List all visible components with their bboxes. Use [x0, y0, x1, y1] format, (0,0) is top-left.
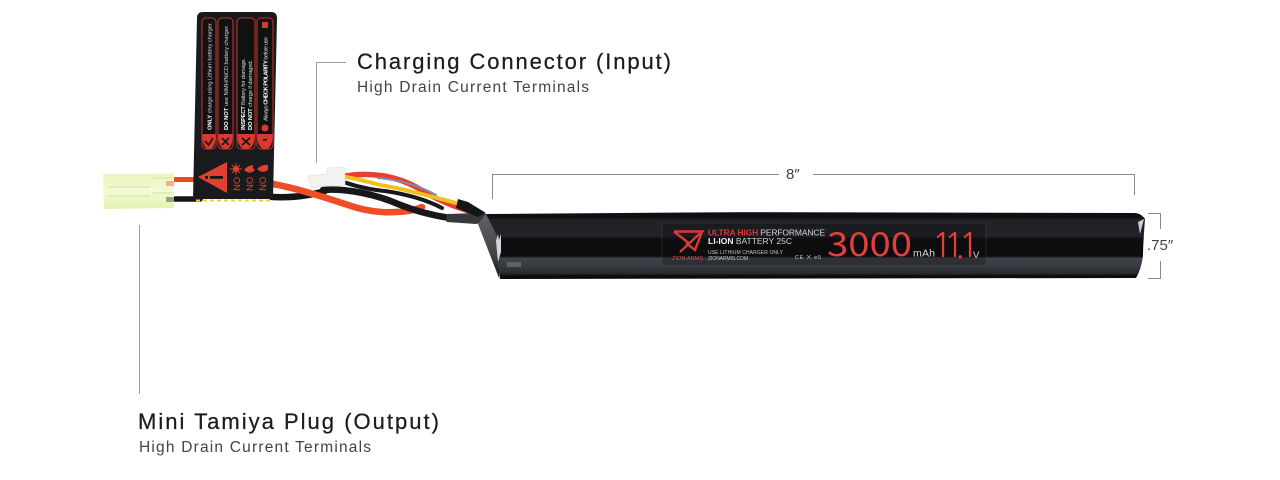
- no labels: NO: [245, 177, 256, 191]
- capacity: 3000: [827, 218, 912, 266]
- strip 4: [257, 18, 273, 149]
- cell: [486, 212, 1145, 279]
- dimension: length 8 inches: [492, 166, 1134, 199]
- heading: charging connector: [357, 49, 671, 96]
- capacity unit: mAh: [913, 248, 935, 260]
- strip 1: [202, 18, 216, 149]
- strip 3: DO NOT charge if damaged.: [248, 60, 254, 130]
- output wires: [175, 177, 200, 182]
- battery label: [662, 218, 986, 266]
- black wire rear: [272, 191, 325, 197]
- heading: mini tamiya plug: Mini Tamiya Plug (Output): [138, 409, 439, 434]
- dimension: diameter .75 inches: [1147, 214, 1174, 278]
- balance black wire: [333, 178, 442, 208]
- voltage: 11.1: [932, 229, 979, 262]
- strip 3: INSPECT Battery for damage.: [241, 58, 247, 130]
- end highlight: [1138, 219, 1144, 234]
- heading: mini tamiya plug: [138, 409, 439, 456]
- icon: drop: [257, 165, 268, 172]
- icon: sun: [230, 163, 242, 175]
- strip 2: DO NOT use NiMH/NiCD battery charger.: [224, 25, 230, 130]
- chemistry line: LI-ION BATTERY 25C: [708, 236, 792, 246]
- black wire front: [323, 190, 450, 218]
- warning triangle: [198, 162, 227, 193]
- charging connector plug: [308, 168, 345, 188]
- mini tamiya plug: [103, 174, 174, 209]
- leader line: charging connector: [316, 62, 346, 163]
- end fold: [478, 214, 502, 278]
- heat shrink black tip: [456, 199, 486, 217]
- fold highlight: [496, 234, 501, 262]
- tag background: [193, 12, 277, 199]
- leader line: mini tamiya plug: [138, 225, 140, 394]
- lower red wire: [273, 184, 422, 212]
- balance yellow wire: [335, 176, 456, 203]
- upper red wire: [345, 174, 472, 212]
- strip 1: ONLY charge using Lithium battery charger.: [208, 22, 214, 130]
- wiring harness: [175, 174, 472, 218]
- dimension: diameter .75 inches: .75″: [1147, 237, 1174, 254]
- dimension: length 8 inches: 8″: [786, 166, 800, 183]
- no labels: NO: [232, 177, 243, 191]
- charger note: USE LITHIUM CHARGER ONLY: [708, 250, 784, 256]
- heading: charging connector: High Drain Current Terminals: [357, 79, 589, 96]
- performance line: ULTRA HIGH PERFORMANCE: [708, 228, 825, 238]
- strip 2: [218, 18, 233, 149]
- website: ZIONARMIS.COM: [708, 256, 748, 262]
- strip 3: [237, 18, 255, 149]
- strip 4: Always CHECK POLARITY before use: [264, 37, 270, 121]
- icon: flame: [244, 165, 255, 173]
- certifications: CE ⨉ e5: [795, 254, 821, 261]
- band highlight: [507, 262, 521, 267]
- battery body: [478, 212, 1145, 279]
- heat shrink: [446, 213, 487, 224]
- heading: mini tamiya plug: High Drain Current Terminals: [139, 439, 371, 456]
- icon: zion arms logo: [674, 232, 702, 252]
- heading: charging connector: Charging Connector (Input): [357, 49, 671, 74]
- no labels: NO: [258, 177, 269, 191]
- no labels: [232, 177, 269, 191]
- balance blue wire: [378, 178, 436, 195]
- voltage unit: V: [973, 250, 980, 261]
- logo wordmark: ZION ARMS: [672, 256, 703, 262]
- yellow seam: [196, 200, 272, 202]
- warning tag: [193, 12, 277, 200]
